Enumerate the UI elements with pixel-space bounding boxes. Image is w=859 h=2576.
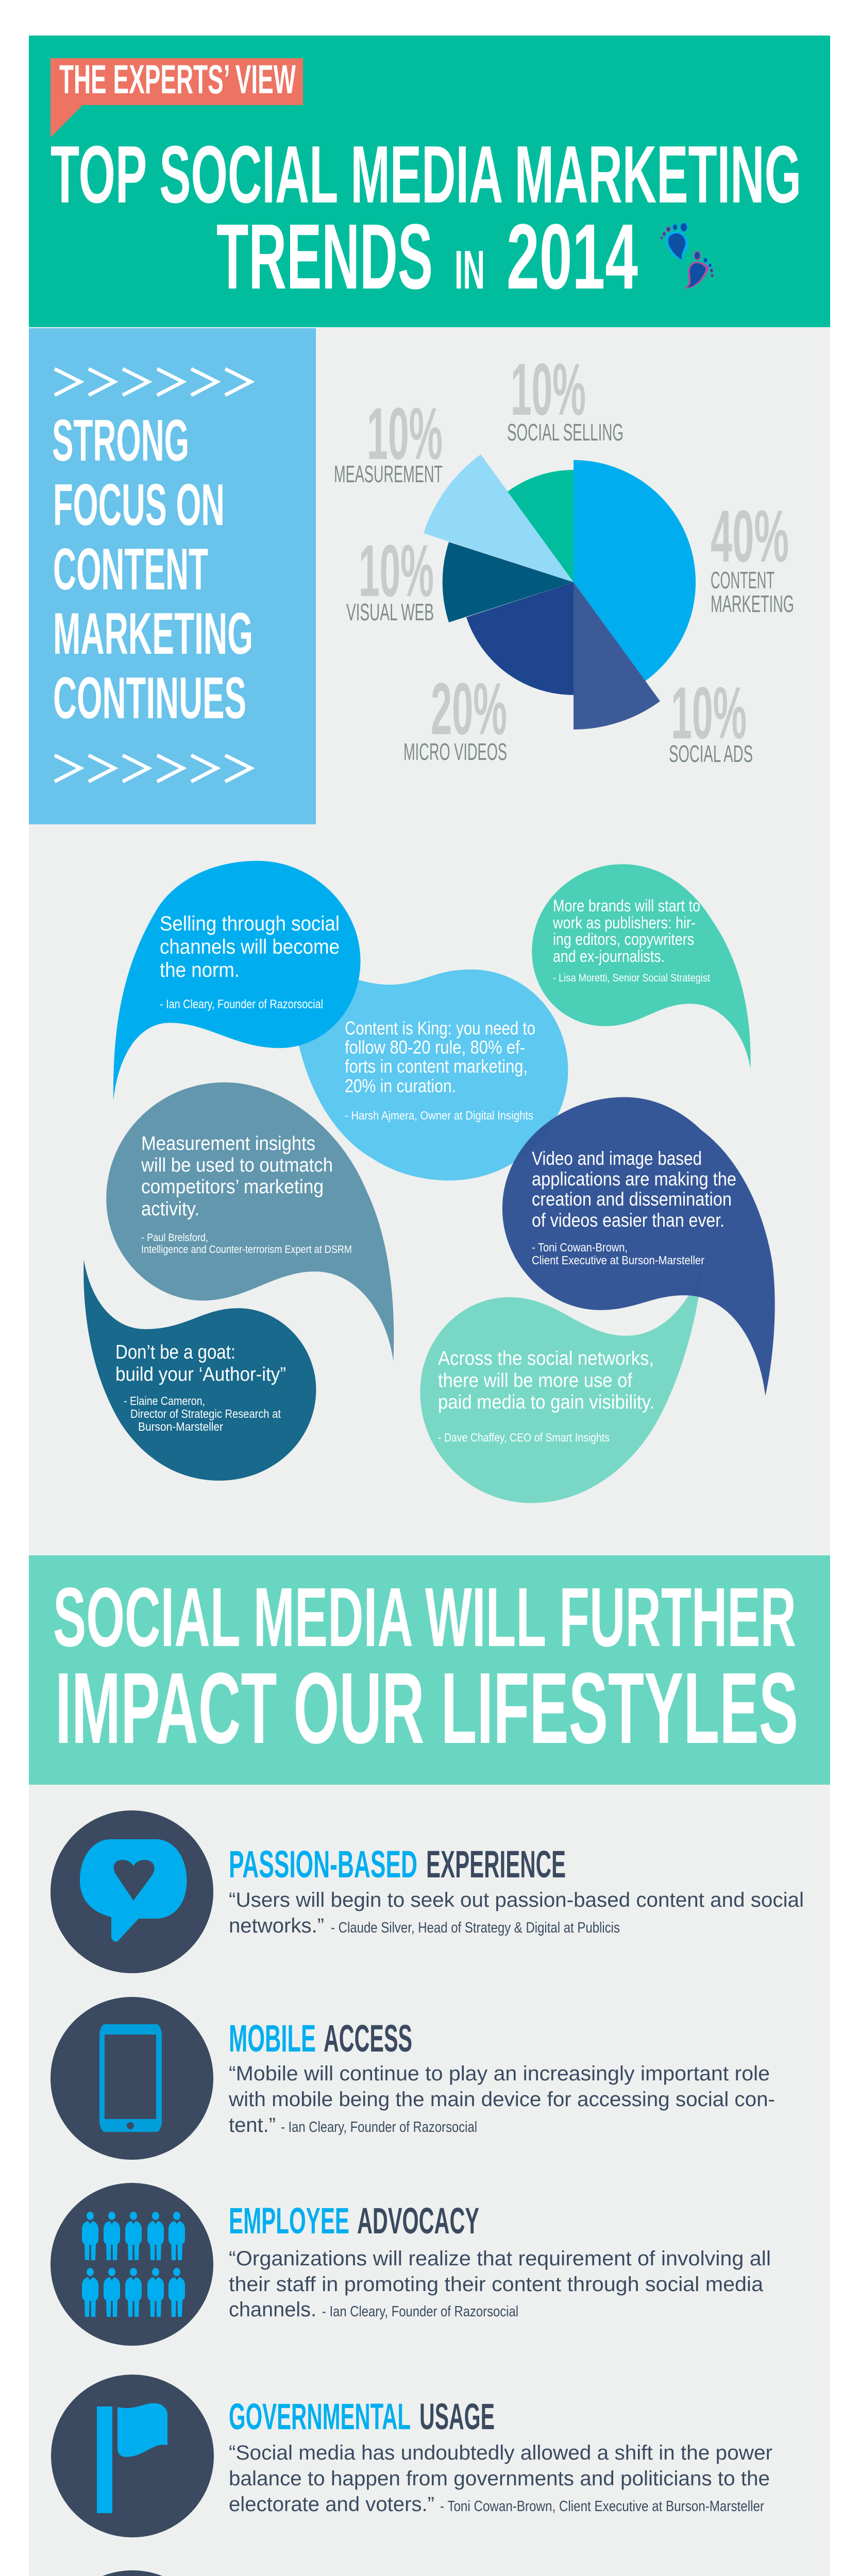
icon: phone: [50, 1997, 213, 2160]
bubble text: paid media: there will be more use of: [438, 1370, 632, 1392]
bubble text: publishers: [552, 896, 710, 984]
slice: measurement 10%: [424, 454, 574, 582]
quote: with mobile being the main device for accessing social con-: [228, 2088, 775, 2111]
item: mobile access: [50, 1997, 775, 2160]
item: governmental usage: [51, 2375, 772, 2537]
heading: strong focus: [52, 408, 253, 731]
icon: heart speech bubble: [50, 1810, 213, 1973]
quote: “Mobile will continue to play an increasingly important role: [229, 2062, 770, 2085]
slice: visual web 10%: [443, 542, 574, 622]
heading: EXPERIENCE: [426, 1843, 566, 1886]
label: content marketing: [711, 496, 794, 617]
heading: ACCESS: [324, 2017, 412, 2060]
quote: [229, 2247, 771, 2321]
bubble text: video and image: applications are making the: [532, 1168, 736, 1190]
heading: strong focus: MARKETING: [53, 601, 253, 667]
heading: EMPLOYEE: [229, 2201, 349, 2242]
bubble: publishers: [532, 864, 751, 1069]
chart labels: [334, 349, 794, 767]
bubble text: selling through social: the norm.: [160, 959, 240, 981]
quote: channels.: [229, 2298, 316, 2321]
label: social selling: SOCIAL SELLING: [507, 419, 624, 446]
label: visual web: 10%: [359, 530, 434, 612]
panel: strong focus on content marketing: [29, 328, 316, 824]
label: measurement: 10%: [367, 393, 443, 475]
slice: micro videos 20%: [466, 582, 574, 695]
title: 2014: [507, 205, 638, 309]
bubble text: paid media: - Dave Chaffey, CEO of Smart Insights: [438, 1431, 610, 1444]
icon: flag: [51, 2375, 214, 2537]
slice: content marketing 40%: [574, 460, 696, 681]
bubble text: paid media: paid media to gain visibility.: [438, 1392, 654, 1413]
bubble text: author-ity: Don’t be a goat:: [115, 1342, 235, 1363]
quote: “Organizations will realize that requirement of involving all: [229, 2247, 771, 2270]
icon: heart: [51, 2570, 214, 2576]
quote: [229, 1889, 804, 1937]
bubble text: publishers: and ex-journalists.: [553, 947, 665, 965]
bubble text: content is king: [345, 1018, 535, 1122]
bubble text: publishers: - Lisa Moretti, Senior Social Strategist: [553, 972, 710, 984]
heading: strong focus: CONTINUES: [53, 666, 246, 731]
label: content marketing: CONTENT: [711, 567, 774, 594]
title: [50, 129, 801, 309]
quote: “Social media has undoubtedly allowed a shift in the power: [229, 2442, 772, 2464]
bubble text: video and image: [532, 1148, 736, 1267]
quote: networks.”: [229, 1914, 324, 1937]
label: measurement: [334, 393, 443, 487]
heading: strong focus: CONTENT: [53, 537, 208, 602]
label: micro videos: 20%: [431, 668, 507, 750]
chart: exploded pie: [424, 454, 696, 730]
quote: tent.”: [229, 2114, 276, 2137]
quote: [228, 2062, 775, 2137]
bubble text: selling through social: [160, 912, 340, 1011]
bubble: paid media: [420, 1266, 703, 1503]
bubble text: measurement insights: - Paul Brelsford,: [141, 1232, 208, 1244]
chevrons: bottom row: [55, 755, 251, 782]
bubble: video and image: [502, 1097, 775, 1396]
bubble text: publishers: ing editors, copywriters: [553, 930, 694, 948]
bubble text: content is king: 20% in curation.: [345, 1075, 456, 1096]
bubble text: selling through social: - Ian Cleary, Founder of Razorsocial: [160, 997, 323, 1011]
label: content marketing: MARKETING: [711, 590, 794, 617]
quote: - Toni Cowan-Brown, Client Executive at Burson-Marsteller: [440, 2498, 764, 2515]
heading: GOVERNMENTAL: [229, 2397, 411, 2437]
bubble: selling through social: [113, 861, 361, 1100]
bubble text: author-ity: Director of Strategic Research at: [130, 1407, 281, 1420]
item: social media for social good: [51, 2570, 759, 2576]
label: content marketing: 40%: [711, 496, 789, 578]
bubble text: video and image: Client Executive at Burson-Marsteller: [532, 1253, 704, 1267]
bubble text: selling through social: channels will become: [160, 936, 340, 958]
label: micro videos: [403, 668, 507, 765]
bubble text: paid media: Across the social networks,: [438, 1348, 654, 1369]
bubble text: content is king: follow 80-20 rule, 80% ef-: [345, 1037, 525, 1058]
heading: strong focus: STRONG: [52, 408, 189, 473]
label: social selling: [507, 349, 624, 446]
bubble text: content is king: Content is King: you need to: [345, 1018, 535, 1039]
bubble text: measurement insights: activity.: [141, 1198, 199, 1220]
heading: PASSION-BASED: [229, 1843, 417, 1886]
bubble text: author-ity: Burson-Marsteller: [138, 1420, 223, 1433]
panel: content background: [29, 327, 830, 1555]
label: measurement: MEASUREMENT: [334, 461, 443, 487]
quote: electorate and voters.”: [229, 2493, 434, 2516]
bubble text: measurement insights: competitors’ marketing: [141, 1176, 324, 1198]
label: social ads: SOCIAL ADS: [669, 740, 753, 767]
bubble text: author-ity: - Elaine Cameron,: [124, 1394, 205, 1408]
bubble text: measurement insights: will be used to outmatch: [141, 1155, 333, 1176]
bubble text: paid media: [438, 1348, 654, 1444]
bubble text: author-ity: build your ‘Author-ity”: [115, 1364, 286, 1385]
quote: - Ian Cleary, Founder of Razorsocial: [281, 2119, 477, 2136]
panel: lifestyles heading: [29, 1555, 830, 1785]
chevrons: top row: [55, 369, 251, 395]
label: visual web: VISUAL WEB: [346, 599, 434, 625]
title: TRENDS: [216, 205, 433, 309]
heading: strong focus: FOCUS ON: [53, 472, 225, 538]
slice: social ads 10%: [574, 582, 660, 730]
bubble text: measurement insights: [141, 1133, 352, 1256]
bubble text: measurement insights: Intelligence and Counter-terrorism Expert at DSRM: [141, 1244, 352, 1256]
label: visual web: [346, 530, 434, 625]
bubble text: video and image: Video and image based: [532, 1148, 702, 1169]
bubble: measurement insights: [106, 1082, 394, 1361]
quote: “Users will begin to seek out passion-based content and social: [229, 1889, 804, 1911]
bubble: content is king: [298, 970, 568, 1180]
bubble text: author-ity: [115, 1342, 286, 1433]
bubble: author-ity: [83, 1260, 316, 1481]
icon: employees: [50, 2183, 213, 2346]
title: IN: [454, 240, 485, 300]
bubble text: content is king: forts in content marketing,: [345, 1056, 528, 1077]
label: social ads: [669, 672, 753, 767]
heading: USAGE: [419, 2397, 495, 2437]
callout: the experts' view: THE EXPERTS’ VIEW: [59, 56, 296, 102]
bubble text: video and image: of videos easier than ever.: [532, 1210, 725, 1231]
bubble text: publishers: More brands will start to: [553, 896, 700, 915]
quote: - Ian Cleary, Founder of Razorsocial: [322, 2303, 518, 2320]
bubble text: selling through social: Selling through social: [160, 912, 340, 935]
label: social selling: 10%: [511, 349, 586, 431]
label: micro videos: MICRO VIDEOS: [403, 738, 507, 765]
quote: - Claude Silver, Head of Strategy & Digital at Publicis: [331, 1920, 620, 1936]
bubble text: video and image: - Toni Cowan-Brown,: [532, 1241, 628, 1254]
label: social ads: 10%: [671, 672, 747, 754]
icon: footprints: [661, 223, 713, 289]
panel: lifestyle items background: [29, 1785, 830, 2576]
bubble text: publishers: work as publishers: hir-: [552, 913, 696, 932]
heading: ADVOCACY: [357, 2201, 479, 2242]
quote: balance to happen from governments and politicians to the: [229, 2467, 770, 2490]
bubble shapes: [83, 861, 775, 1503]
bubble text: measurement insights: Measurement insights: [141, 1133, 315, 1155]
quote: [229, 2442, 772, 2516]
bubble text: content is king: - Harsh Ajmera, Owner at Digital Insights: [345, 1109, 533, 1122]
heading: MOBILE: [229, 2017, 316, 2060]
bubble text: video and image: creation and dissemination: [532, 1189, 732, 1210]
callout: the experts' view: [50, 56, 303, 138]
panel: header: [29, 36, 830, 327]
slice: social selling 10%: [508, 470, 574, 582]
quote: their staff in promoting their content through social media: [229, 2273, 764, 2296]
item: employee advocacy: [50, 2183, 771, 2346]
item: passion-based experience: [50, 1810, 804, 1973]
